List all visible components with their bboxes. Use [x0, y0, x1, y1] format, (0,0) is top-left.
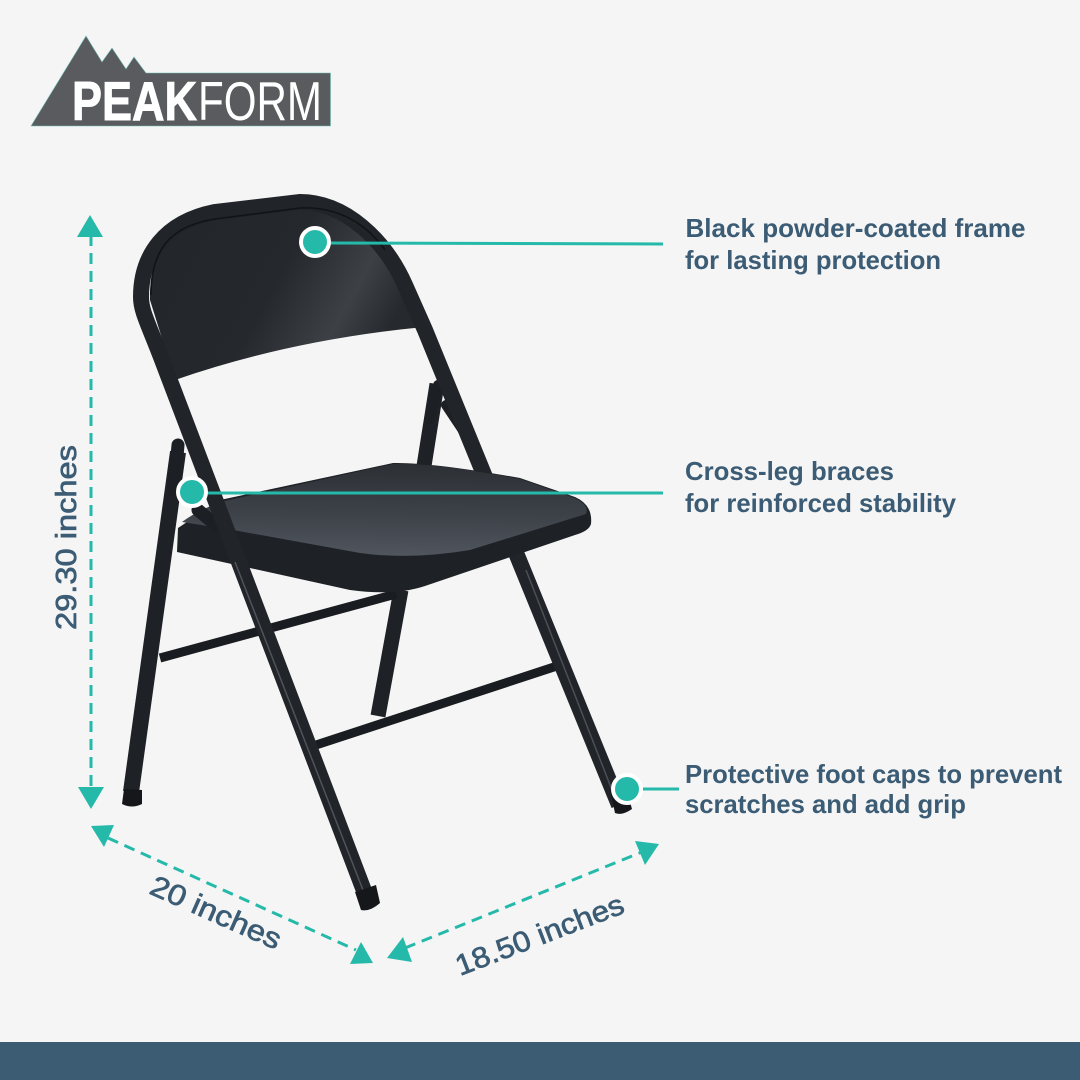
callout: foot caps: [613, 759, 1062, 819]
front foot cap: [355, 885, 380, 910]
callout dot: [301, 228, 329, 256]
logo mountain badge: [31, 36, 330, 126]
footer bar: [0, 1042, 1080, 1080]
callout: braces: [178, 456, 957, 518]
seat: [177, 463, 591, 592]
callout dot: [613, 775, 641, 803]
callout text: scratches and add grip: [685, 789, 966, 819]
callout text: [685, 213, 1026, 275]
callout text: Cross-leg braces: [685, 456, 894, 486]
callout dot: [178, 478, 206, 506]
front leg highlight: [235, 562, 363, 890]
rear right leg: [378, 384, 437, 716]
chair: [122, 202, 632, 910]
front cross bar: [316, 665, 560, 745]
depth label: 18.50 inches: [451, 889, 629, 983]
back frame and right leg: [141, 202, 619, 805]
width arrow head: [91, 825, 114, 847]
rear cross bar: [160, 594, 396, 658]
depth arrow head: [635, 841, 659, 865]
callout line: [328, 243, 663, 244]
callout text: Protective foot caps to prevent: [685, 759, 1062, 789]
callout text: [685, 759, 1062, 819]
backrest inner edge: [151, 208, 385, 295]
depth arrow line: [405, 852, 642, 948]
width arrow head: [350, 942, 373, 964]
rear left leg: [131, 452, 178, 792]
height label: 29.30 inches: [51, 445, 83, 630]
callout text: Black powder-coated frame: [686, 213, 1026, 243]
left hinge brace: [174, 445, 217, 526]
callout line: [205, 492, 663, 494]
height arrow bottom: [78, 787, 104, 809]
backrest panel: [150, 204, 424, 380]
right foot cap: [610, 790, 632, 814]
height dimension: [51, 215, 104, 809]
depth arrow head: [387, 937, 412, 962]
callout text: for lasting protection: [685, 245, 941, 275]
height arrow line: [90, 235, 92, 790]
rear foot cap: [122, 789, 142, 806]
right hinge brace: [429, 385, 464, 432]
height arrow top: [77, 215, 103, 237]
right leg highlight: [526, 570, 612, 790]
logo: [31, 36, 330, 132]
seat apron: [177, 463, 591, 592]
depth dimension: [387, 841, 659, 983]
width dimension: [91, 825, 373, 964]
width arrow line: [108, 838, 356, 950]
callout line: [643, 788, 679, 790]
logo wordmark bold: PEAK: [72, 70, 197, 132]
callout: frame: [301, 213, 1026, 275]
callout text: for reinforced stability: [685, 488, 957, 518]
logo wordmark regular: FORM: [198, 70, 322, 132]
seat surface: [182, 464, 587, 556]
width label: 20 inches: [145, 870, 286, 956]
front left leg: [141, 297, 366, 896]
callout text: [685, 456, 957, 518]
